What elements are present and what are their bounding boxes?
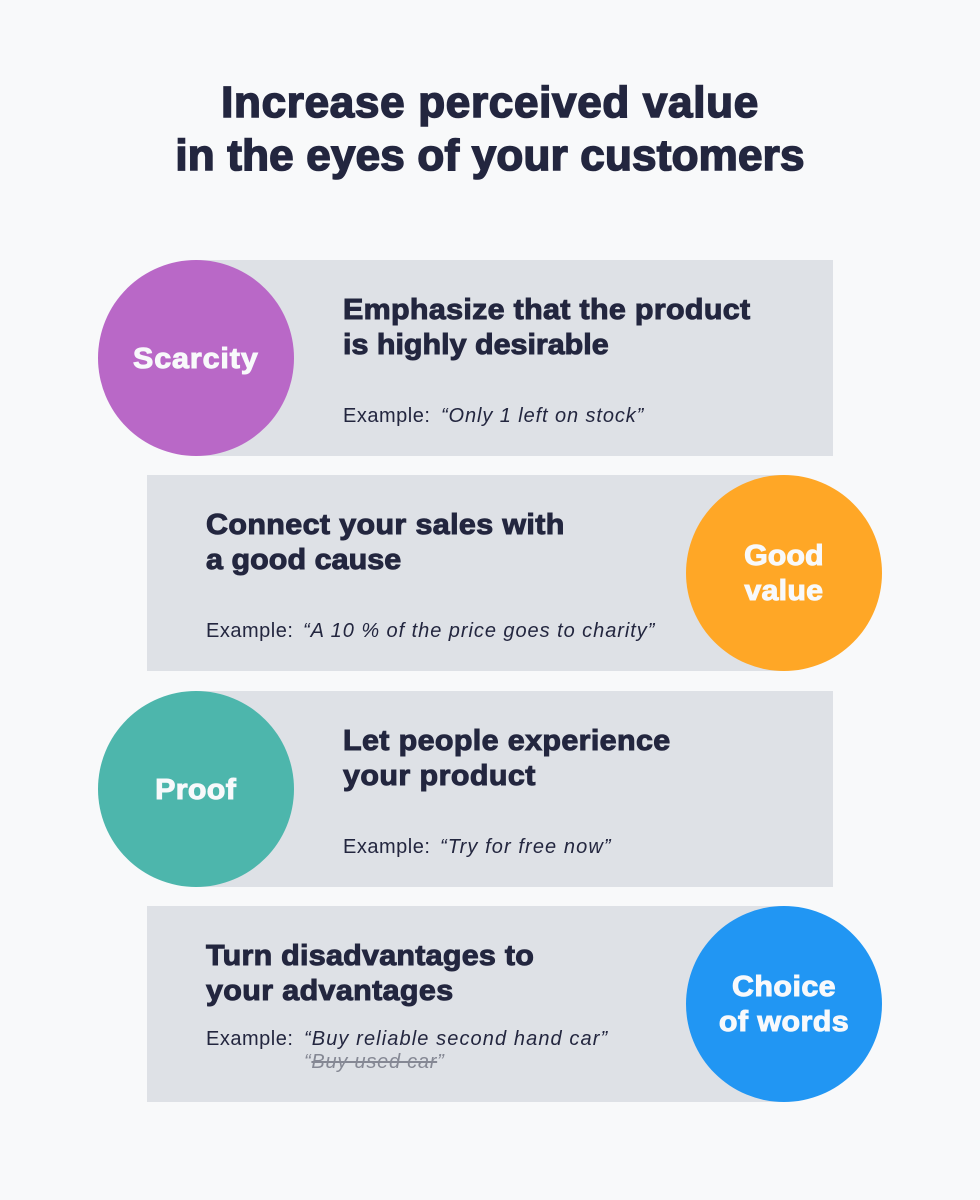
circle: scarcity: Scarcity bbox=[133, 342, 259, 374]
example: choice of words: Example: bbox=[206, 1028, 293, 1050]
band: scarcity bbox=[196, 260, 833, 456]
panel: choice of words bbox=[147, 906, 882, 1102]
circle: choice of words: Choice bbox=[732, 971, 836, 1003]
example: good value: “A 10 % of the price goes to charity” bbox=[303, 620, 655, 642]
example: proof: Example: bbox=[343, 836, 430, 858]
heading: good value bbox=[206, 509, 565, 576]
band: choice of words bbox=[147, 906, 784, 1102]
panel: good value bbox=[147, 475, 882, 671]
heading: good value: a good cause bbox=[206, 544, 401, 576]
example: choice of words: “Buy reliable second hand car” bbox=[304, 1028, 608, 1050]
heading: choice of words bbox=[206, 940, 534, 1007]
band: good value bbox=[147, 475, 784, 671]
circle: choice of words: of words bbox=[719, 1006, 849, 1038]
panel: proof bbox=[98, 691, 833, 887]
heading: scarcity: is highly desirable bbox=[343, 329, 609, 361]
band: proof bbox=[196, 691, 833, 887]
circle: good value: Good bbox=[744, 540, 824, 572]
heading: proof bbox=[342, 725, 671, 792]
example: scarcity: Example: bbox=[343, 405, 430, 427]
example: scarcity: “Only 1 left on stock” bbox=[441, 405, 644, 427]
circle: scarcity bbox=[98, 260, 294, 456]
heading: proof: Let people experience bbox=[343, 725, 671, 757]
circle: good value bbox=[686, 475, 882, 671]
heading: scarcity: Emphasize that the product bbox=[343, 294, 750, 326]
circle: choice of words bbox=[686, 906, 882, 1102]
example: scarcity bbox=[343, 405, 644, 427]
heading: choice of words: your advantages bbox=[206, 975, 454, 1007]
circle: proof bbox=[98, 691, 294, 887]
title: Increase perceived value bbox=[221, 78, 759, 127]
example: proof bbox=[343, 836, 612, 858]
example: good value: Example: bbox=[206, 620, 293, 642]
title: in the eyes of your customers bbox=[175, 131, 805, 180]
heading: choice of words: Turn disadvantages to bbox=[206, 940, 534, 972]
example: proof: “Try for free now” bbox=[440, 836, 612, 858]
title bbox=[175, 78, 805, 180]
heading: scarcity bbox=[343, 294, 750, 361]
struck-through example: “Buy used car” bbox=[304, 1051, 445, 1073]
heading: proof: your product bbox=[343, 760, 536, 792]
circle: proof: Proof bbox=[155, 774, 237, 806]
circle: good value: value bbox=[745, 575, 823, 607]
heading: good value: Connect your sales with bbox=[206, 509, 565, 541]
panel: scarcity bbox=[98, 260, 833, 456]
